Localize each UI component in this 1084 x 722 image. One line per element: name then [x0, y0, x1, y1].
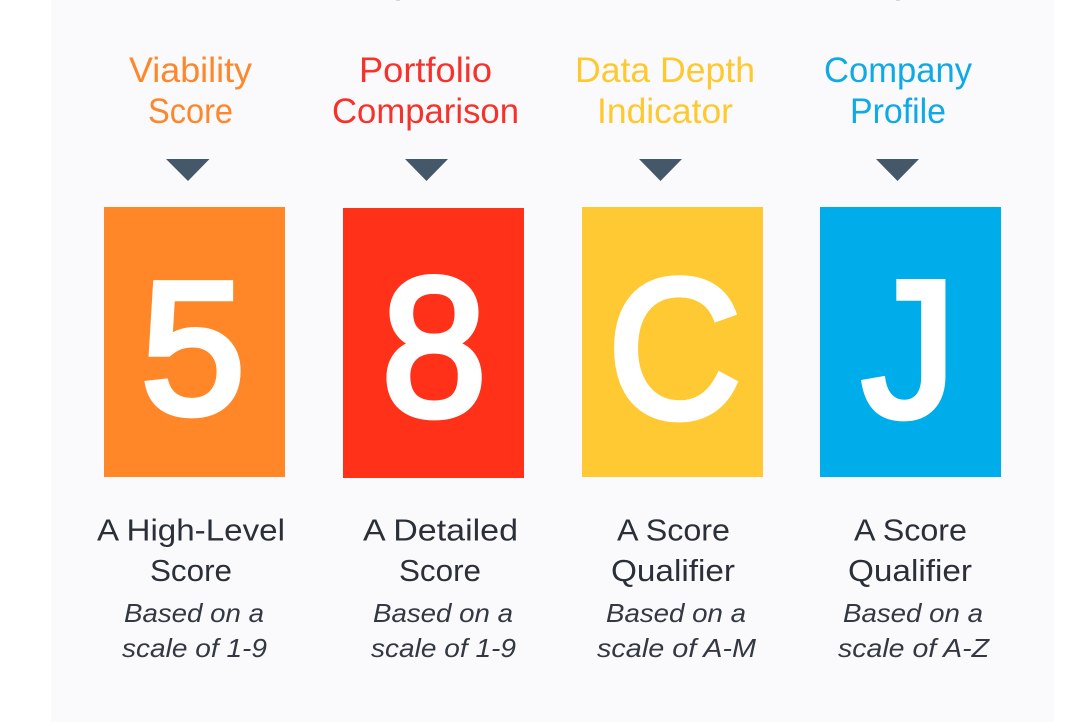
- note: scale of A-M: scale of A-M: [597, 633, 756, 663]
- note: scale of A-M: Based on a: [606, 598, 746, 628]
- card: score 5: [104, 207, 285, 477]
- note: scale of A-Z: Based on a: [843, 598, 983, 628]
- heading: Company Profile: [824, 51, 972, 131]
- column: Viability Score: [97, 51, 285, 663]
- card: score 8: 8: [382, 237, 487, 457]
- column: Company Profile: [820, 51, 1001, 663]
- label: A Score Qualifier: [848, 512, 972, 588]
- heading: Portfolio Comparison: Comparison: [332, 92, 519, 131]
- card: letter J: [820, 207, 1001, 477]
- note: scale of 1-9: Based on a: [124, 598, 264, 628]
- heading: Data Depth Indicator: [575, 51, 755, 131]
- arrow: down triangle: [166, 159, 210, 181]
- card: score 5: 5: [141, 243, 245, 453]
- heading: Viability Score: Viability: [129, 51, 252, 90]
- arrow: down triangle: [639, 159, 682, 181]
- label: A Detailed Score: [363, 512, 518, 588]
- note: scale of 1-9: [122, 598, 267, 663]
- note: scale of 1-9: scale of 1-9: [122, 633, 267, 663]
- label: A Score Qualifier: A Score: [617, 512, 730, 548]
- label: A High-Level Score: A High-Level: [97, 512, 285, 548]
- note: scale of A-Z: [838, 598, 990, 663]
- label: A Score Qualifier: A Score: [854, 512, 967, 548]
- note: scale of 1-9: Based on a: [373, 598, 513, 628]
- heading: Data Depth Indicator: Indicator: [597, 92, 733, 131]
- label: A Score Qualifier: Qualifier: [848, 553, 972, 588]
- heading: Portfolio Comparison: [332, 51, 519, 131]
- note: scale of A-M: [597, 598, 756, 663]
- label: A High-Level Score: Score: [150, 553, 232, 588]
- card: letter C: C: [608, 238, 741, 459]
- label: A Score Qualifier: Qualifier: [611, 553, 735, 588]
- card: letter C: [582, 207, 763, 477]
- heading: Company Profile: Company: [824, 51, 972, 90]
- heading: Data Depth Indicator: Data Depth: [575, 51, 755, 90]
- note: scale of A-Z: scale of A-Z: [838, 633, 990, 663]
- note: scale of 1-9: [371, 598, 516, 663]
- label: A Score Qualifier: [611, 512, 735, 588]
- arrow: down triangle: [876, 159, 919, 181]
- label: A Detailed Score: Score: [399, 553, 481, 588]
- heading: Company Profile: Profile: [850, 92, 946, 131]
- note: scale of 1-9: scale of 1-9: [371, 633, 516, 663]
- column: Portfolio Comparison: [332, 51, 524, 663]
- card: score 8: [343, 208, 524, 478]
- card: letter J: J: [862, 241, 956, 458]
- column: Data Depth Indicator: [575, 51, 763, 663]
- heading: Viability Score: Score: [148, 92, 233, 131]
- arrow: down triangle: [405, 159, 448, 181]
- heading: Portfolio Comparison: Portfolio: [359, 51, 492, 90]
- label: A Detailed Score: A Detailed: [363, 512, 518, 548]
- heading: Viability Score: [129, 51, 252, 131]
- label: A High-Level Score: [97, 512, 285, 588]
